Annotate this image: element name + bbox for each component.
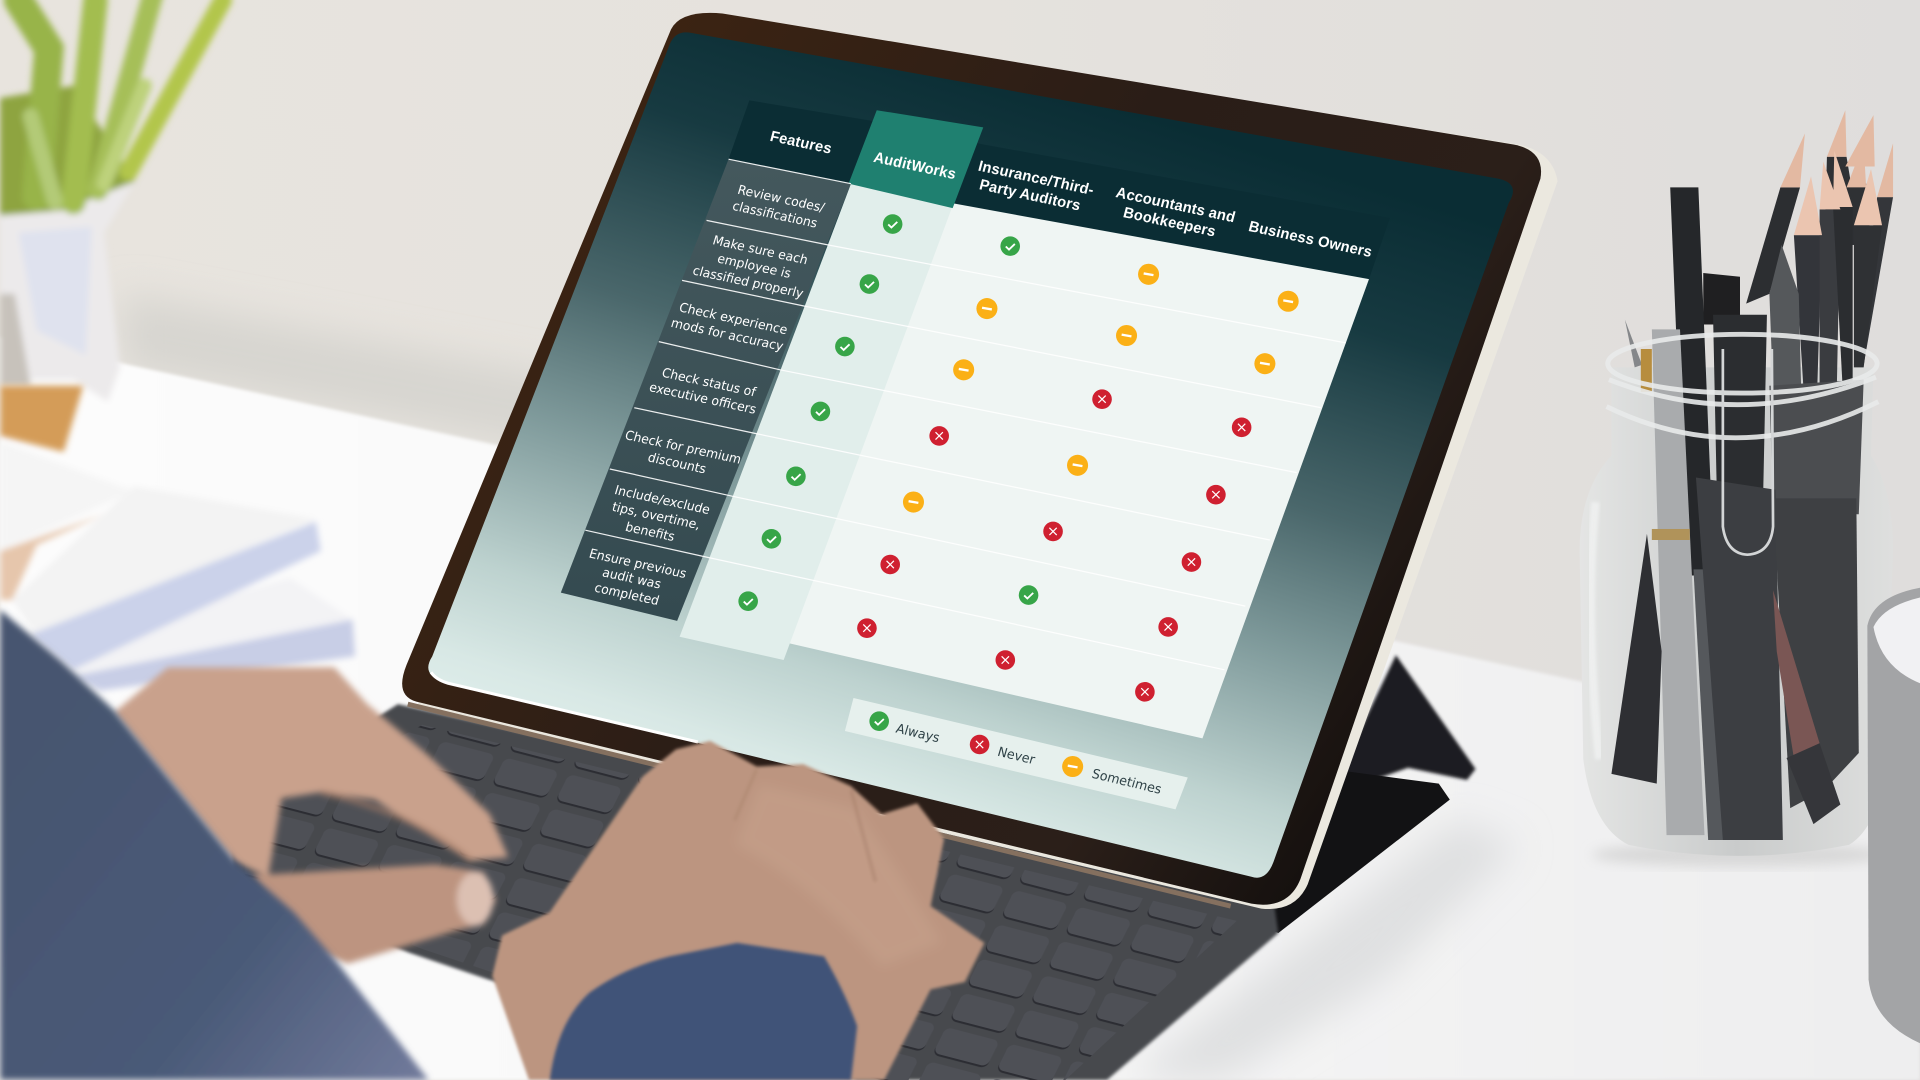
feature: premium discounts: discounts — [646, 449, 708, 476]
features column — [561, 159, 851, 621]
feature: executive officers: Check status of — [660, 365, 758, 400]
hands and sleeves — [0, 610, 984, 1080]
AuditWorks column body — [680, 184, 953, 660]
feature: previous audit — [587, 546, 688, 608]
feature: tips and overtime: tips, overtime, — [610, 499, 702, 532]
feature: tips and overtime — [610, 482, 712, 544]
jar rim rings — [1607, 334, 1878, 438]
books stack — [0, 386, 355, 691]
mug interior — [1873, 598, 1920, 683]
legend — [845, 698, 1188, 809]
row divider lines — [585, 159, 1346, 670]
right hand — [492, 741, 984, 1080]
feature: review codes: classifications — [731, 198, 819, 231]
legend: never — [970, 735, 1037, 768]
feature: classification: employee is — [716, 251, 793, 281]
foliage base — [0, 86, 135, 216]
upper notebook — [12, 486, 321, 670]
feature: previous audit: Ensure previous — [587, 546, 688, 581]
legend: always — [869, 711, 942, 746]
mug body — [1867, 588, 1920, 1043]
feature: experience mods: Check experience — [677, 299, 790, 337]
AuditWorks header — [849, 110, 983, 208]
white paper — [0, 441, 133, 551]
feature: classification: Make sure each — [711, 232, 810, 267]
tall black pencil — [1670, 187, 1714, 576]
feature: review codes: Review codes/ — [736, 182, 827, 215]
silver rim — [416, 15, 1558, 909]
back of hand — [114, 667, 508, 877]
thumb — [251, 864, 496, 964]
keys — [245, 725, 1237, 1080]
legend: sometimes — [1062, 756, 1163, 798]
feature: tips and overtime: benefits — [624, 519, 677, 544]
jar glass body — [1580, 367, 1893, 856]
bezel — [402, 13, 1541, 905]
feature: experience mods: mods for accuracy — [669, 315, 786, 354]
contact shadow — [1592, 842, 1886, 867]
desk surface — [0, 337, 1920, 1080]
silver pen and nib — [1625, 320, 1704, 835]
heading: Business Owners: Business Owners — [1247, 219, 1374, 261]
white body — [787, 203, 1369, 738]
heading: Features: Features — [768, 129, 833, 158]
keyboard base — [233, 704, 1278, 1080]
bottom hinge line — [408, 704, 1231, 906]
feature: classification: classified properly — [691, 262, 806, 301]
legend: never: Never — [996, 745, 1037, 768]
pot — [0, 184, 133, 402]
heading: Accountants and Bookkeepers: Bookkeepers — [1121, 205, 1217, 241]
left hand — [114, 667, 508, 964]
keyboard shadow on desk — [1127, 820, 1518, 1080]
heading: Insurance/Third-Party Auditors: Insurance/Third- — [976, 159, 1096, 199]
tablet stand — [1329, 655, 1476, 796]
feature: previous audit: audit was — [601, 564, 663, 592]
feature labels — [587, 182, 827, 608]
feature: previous audit: completed — [593, 580, 661, 608]
header band — [729, 100, 1390, 279]
stand base — [1224, 771, 1450, 933]
legend: sometimes: Sometimes — [1090, 767, 1163, 798]
screen — [428, 32, 1513, 878]
heading: AuditWorks: AuditWorks — [872, 150, 958, 183]
left sleeve — [0, 610, 429, 1080]
feature: executive officers: executive officers — [647, 379, 758, 417]
feature: classification — [691, 232, 810, 301]
wooden block — [0, 386, 83, 452]
feature: tips and overtime: Include/exclude — [613, 482, 712, 517]
heading: Insurance/Third-Party Auditors: Party Auditors — [977, 177, 1082, 215]
black pen cap behind — [1703, 273, 1740, 324]
lower notebook — [37, 578, 355, 691]
index shading — [321, 792, 471, 861]
heading: Accountants and Bookkeepers: Accountants and — [1114, 185, 1237, 226]
status icons: Business Owners — [1135, 291, 1299, 702]
thumbnail — [457, 872, 493, 926]
right sleeve — [550, 943, 857, 1080]
keyboard folio — [233, 655, 1476, 1080]
screen bottom reflection — [431, 672, 698, 742]
leaves — [18, 0, 223, 202]
status icons: Accountants and Bookkeepers — [996, 264, 1159, 670]
status icons: Insurance/Third-Party Auditors — [857, 236, 1020, 638]
plant in pot — [0, 0, 223, 402]
mug — [1867, 588, 1920, 1043]
feature: experience mods — [669, 299, 790, 354]
tablet — [402, 13, 1558, 909]
pencil bodies — [1746, 187, 1800, 304]
comparison table — [561, 100, 1390, 738]
jar highlight — [1591, 502, 1599, 759]
pencil jar — [1580, 110, 1893, 867]
wall shadow above desk — [122, 294, 637, 465]
paper clip — [1723, 349, 1773, 555]
feature: review codes — [731, 182, 827, 231]
header labels — [768, 129, 1374, 261]
legend: always: Always — [894, 722, 942, 746]
feature: premium discounts: Check for premium — [623, 427, 743, 467]
grey pencil — [1769, 245, 1801, 392]
status icons: AuditWorks — [738, 214, 902, 611]
legend panel — [845, 698, 1188, 809]
sharpened wood tips — [1780, 133, 1805, 187]
pencils — [1746, 110, 1893, 392]
pens inside jar — [1611, 315, 1859, 840]
upper pencils seen through the neck — [1769, 380, 1864, 514]
